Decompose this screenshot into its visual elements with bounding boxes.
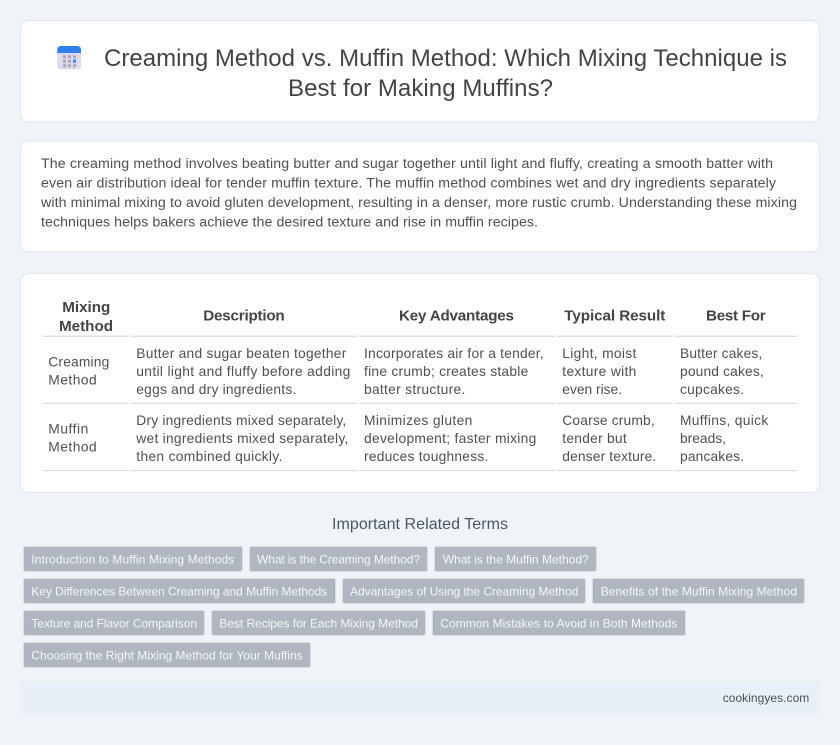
table row: creaming method (48, 346, 764, 397)
text block: intro paragraph: even air distribution ideal for tender muffin texture. The muffin method combines wet and dry ingredients separately (41, 176, 777, 192)
table row: muffin method: wet ingredients mixed separately, (135, 431, 348, 446)
table row: creaming method: eggs and dry ingredients. (136, 382, 296, 397)
text block: intro paragraph: techniques helps bakers achieve the desired texture and rise in muffin recipes. (41, 214, 538, 230)
tag: Best Recipes for Each Mixing Method (219, 616, 418, 630)
tag: Benefits of the Muffin Mixing Method (601, 584, 797, 598)
tag (24, 610, 204, 636)
table row: muffin method: reduces toughness. (364, 449, 488, 464)
tag (250, 546, 428, 572)
table row: creaming method: Light, moist (562, 346, 636, 361)
table header: Method (59, 318, 113, 335)
text block: intro paragraph: with minimal mixing to avoid gluten development, resulting in a denser, more rustic crumb. Understanding these mixing (40, 195, 797, 211)
table row: muffin method: Dry ingredients mixed separately, (136, 413, 346, 428)
table row: muffin method (48, 413, 768, 464)
tag: Advantages of Using the Creaming Method (350, 584, 578, 598)
panel: intro text (20, 141, 820, 252)
table header: Mixing (62, 299, 110, 316)
tag: Key Differences Between Creaming and Muffin Methods (31, 584, 327, 598)
table row: muffin method: breads, (680, 431, 726, 446)
panel: comparison table (20, 274, 820, 492)
table header: Typical Result (564, 308, 665, 324)
tag: Common Mistakes to Avoid in Both Methods (440, 616, 677, 630)
table row: creaming method: Butter cakes, (680, 346, 762, 361)
table row: creaming method: until light and fluffy before adding (136, 364, 350, 379)
table row: muffin method: pancakes. (680, 449, 744, 464)
table row: creaming method: fine crumb; creates stable (364, 364, 529, 379)
panel: related term tags (24, 546, 804, 668)
table row: muffin method: Muffin (48, 422, 88, 437)
tag: Choosing the Right Mixing Method for Your Muffins (31, 648, 303, 662)
title (104, 45, 787, 102)
table row: muffin method: Minimizes gluten (364, 413, 472, 428)
tag (24, 642, 310, 668)
table header: Key Advantages (399, 308, 514, 324)
tag (24, 578, 336, 604)
table row: muffin method: denser texture. (562, 449, 656, 464)
table row: muffin method: Coarse crumb, (562, 413, 655, 428)
footer: cookingyes.com (723, 691, 809, 705)
table header: Best For (706, 308, 766, 324)
tag: What is the Muffin Method? (443, 552, 589, 566)
table row: creaming method: pound cakes, (680, 364, 764, 379)
tag (342, 578, 586, 604)
icon: calendar (57, 46, 81, 69)
footer (20, 681, 820, 715)
tag: Introduction to Muffin Mixing Methods (31, 552, 234, 566)
table row: creaming method: Creaming (48, 355, 109, 370)
table row: creaming method: Incorporates air for a tender, (364, 346, 544, 361)
table row: muffin method: then combined quickly. (136, 449, 282, 464)
table row: creaming method: batter structure. (364, 382, 465, 397)
table row: muffin method: Method (48, 440, 97, 454)
tag: Texture and Flavor Comparison (31, 616, 197, 630)
tag (212, 610, 426, 636)
title: Creaming Method vs. Muffin Method: Which Mixing Technique is (104, 45, 787, 72)
table row: muffin method: development; faster mixing (364, 431, 536, 446)
text block: intro paragraph: The creaming method involves beating butter and sugar together until light and fluffy, creating a smooth batter with (41, 156, 773, 172)
tag (592, 578, 804, 604)
table row: creaming method: Method (48, 372, 97, 388)
table row: creaming method: Butter and sugar beaten together (136, 346, 347, 361)
table header (59, 299, 766, 335)
tag (24, 546, 242, 572)
title: Best for Making Muffins? (288, 75, 553, 102)
text block: intro paragraph (40, 156, 797, 230)
tag (432, 610, 686, 636)
table row: creaming method: even rise. (562, 382, 622, 397)
table row: creaming method: texture with (562, 364, 636, 379)
table row: creaming method: cupcakes. (680, 382, 744, 397)
panel: title card (20, 20, 820, 122)
table header: Description (203, 308, 285, 324)
table row: muffin method: Muffins, quick (680, 413, 768, 428)
table row: muffin method: tender but (562, 431, 627, 446)
tag (434, 546, 596, 572)
heading: important related terms: Important Related Terms (332, 516, 508, 533)
tag: What is the Creaming Method? (257, 552, 420, 566)
